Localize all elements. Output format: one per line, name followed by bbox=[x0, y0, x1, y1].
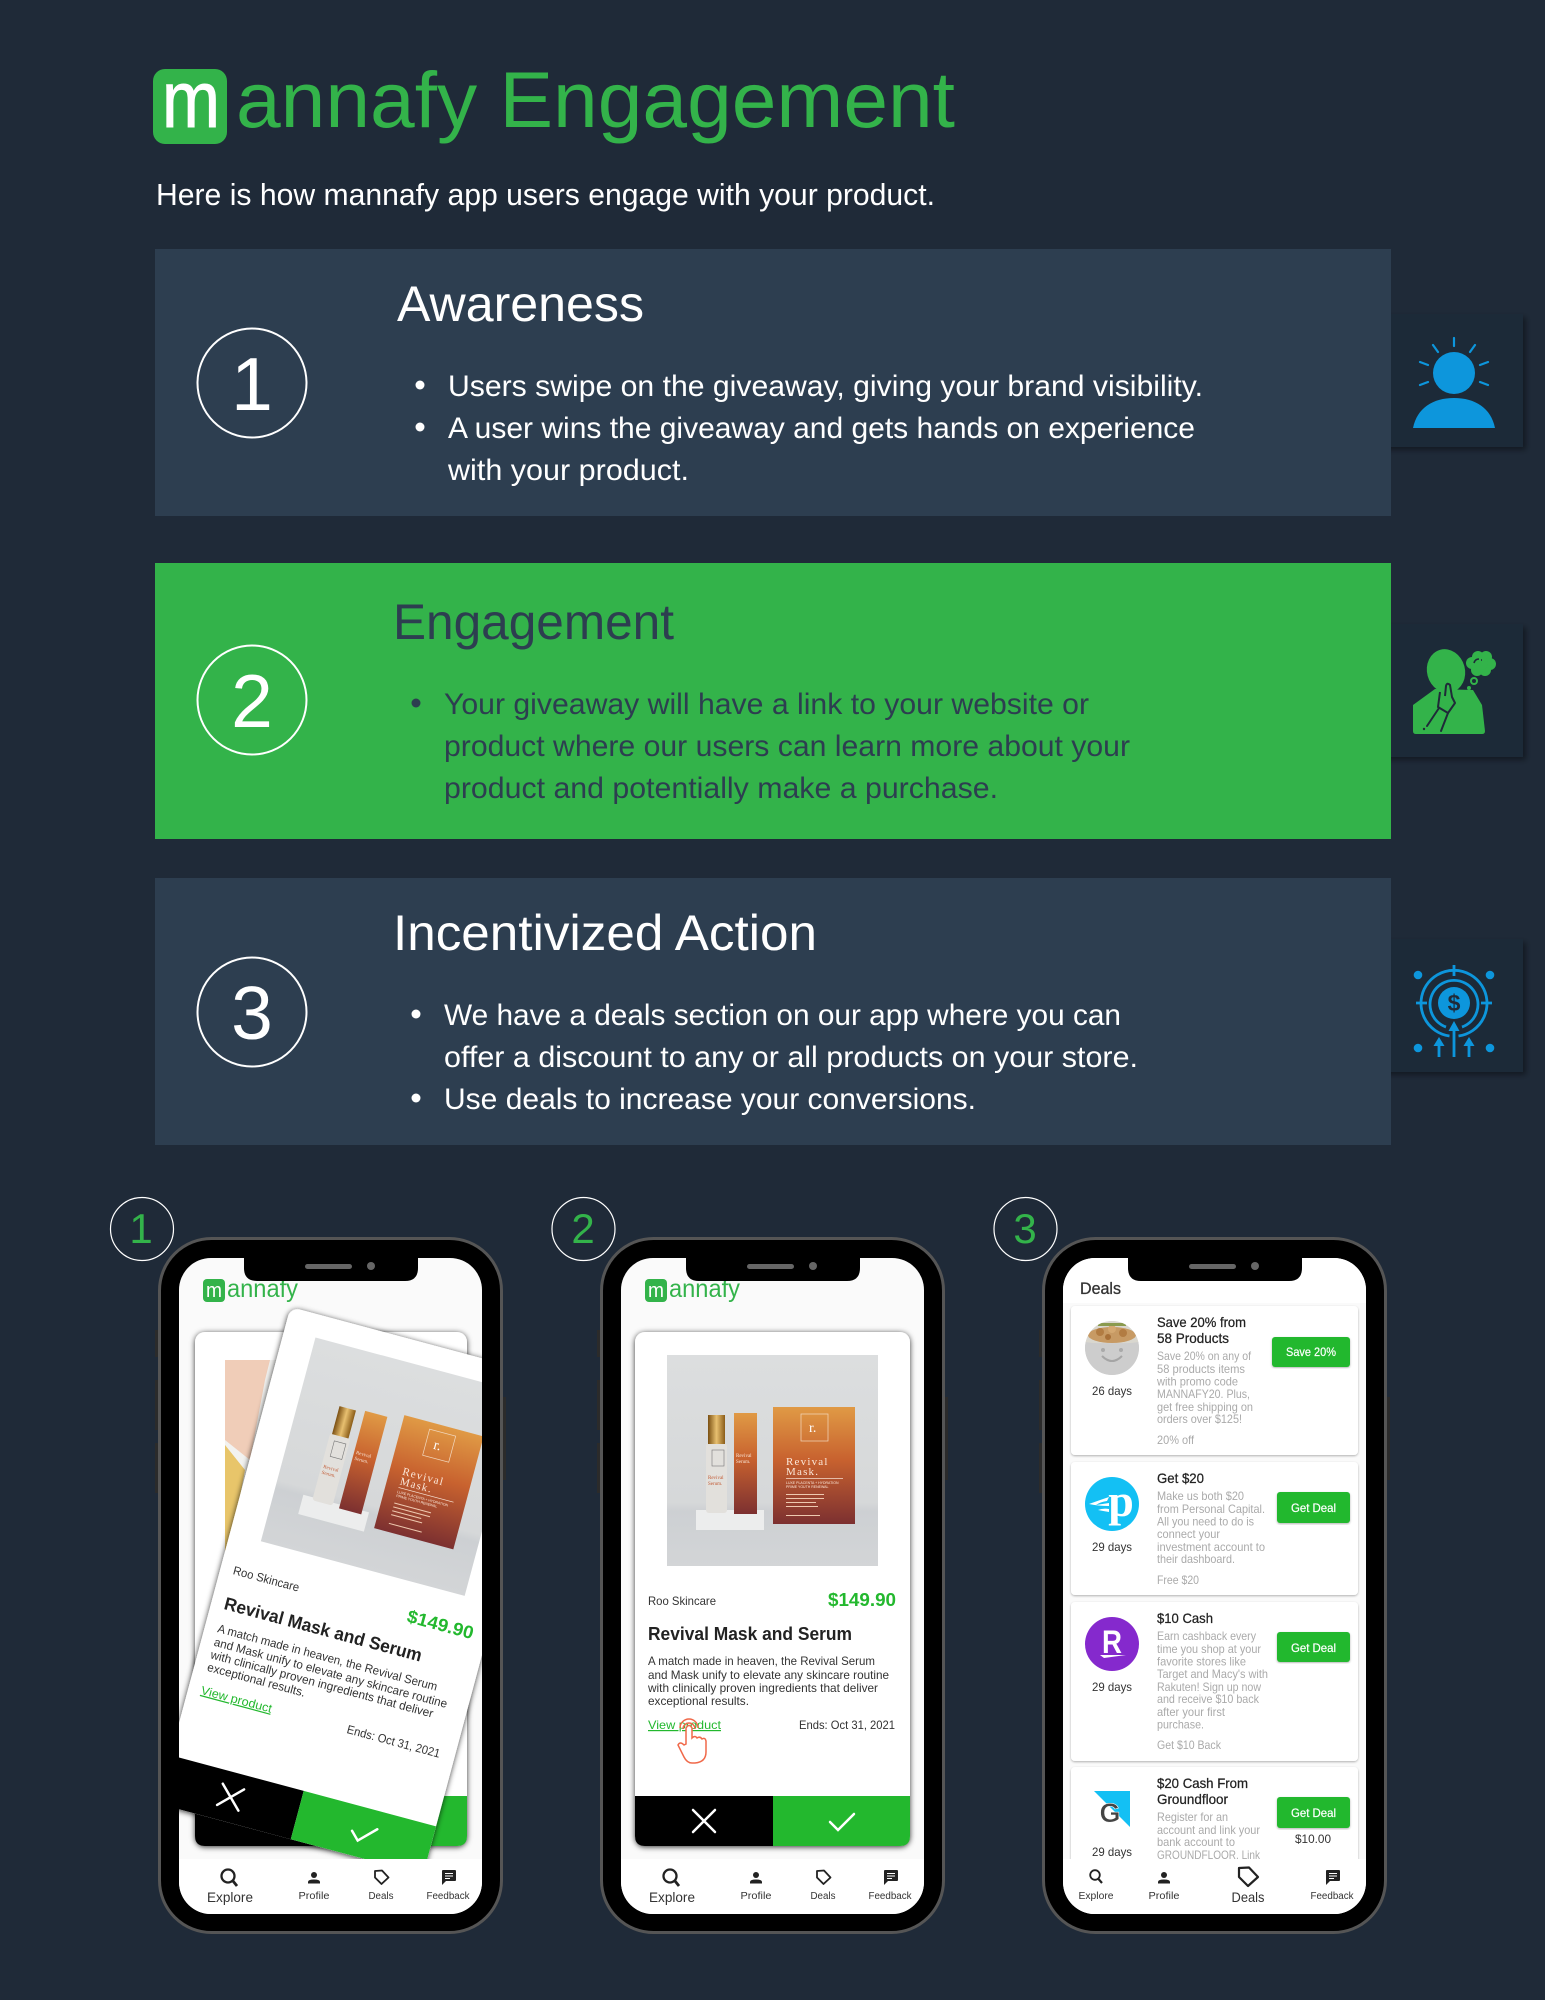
product photo: Revival bbox=[322, 1465, 339, 1474]
deal card 1 bbox=[1071, 1306, 1358, 1455]
logo: m bbox=[206, 1280, 222, 1302]
phone 2: product screen bbox=[597, 1238, 948, 1932]
nav: deals bbox=[368, 1870, 394, 1902]
front swiped card: with clinically proven ingredients that deliver bbox=[208, 1647, 435, 1721]
nav: deals active bbox=[1232, 1868, 1264, 1905]
icon: target with dollar coin: $ bbox=[1448, 990, 1461, 1016]
nav: feedback bbox=[427, 1870, 470, 1899]
deal card 2: Make us both $20 bbox=[1157, 1489, 1244, 1503]
product card: A match made in heaven, the Revival Serum bbox=[648, 1654, 875, 1668]
bottom navigation bbox=[1063, 1859, 1366, 1914]
bullet list bbox=[412, 688, 1130, 805]
deal card 1: with promo code bbox=[1156, 1374, 1238, 1388]
deal image: bowl bbox=[1085, 1321, 1139, 1375]
deal card 3: $10 Cash bbox=[1157, 1610, 1213, 1626]
deal card 3: Target and Macy's with bbox=[1157, 1667, 1268, 1681]
nav: profile bbox=[1149, 1872, 1179, 1899]
deal logo: rakuten bbox=[1085, 1617, 1139, 1671]
product card: exceptional results. bbox=[648, 1694, 749, 1708]
deal logo: personal capital bbox=[1085, 1475, 1139, 1531]
deal card 1: MANNAFY20. Plus, bbox=[1157, 1387, 1250, 1401]
deal card 3: Get $10 Back bbox=[1157, 1738, 1222, 1752]
deal card 3: 29 days bbox=[1092, 1680, 1132, 1694]
product photo: Serum. bbox=[321, 1471, 336, 1479]
deal card 3: favorite stores like bbox=[1157, 1654, 1246, 1668]
product photo: LUXE PLACENTA + HYDRATION bbox=[397, 1490, 449, 1508]
deal card 1: 26 days bbox=[1092, 1384, 1132, 1398]
heading: awareness: Awareness bbox=[397, 276, 644, 332]
deal card 2: Get $20 bbox=[1157, 1470, 1204, 1486]
deal logo: groundfloor: G bbox=[1099, 1798, 1121, 1828]
button: get deal: Get Deal bbox=[1291, 1806, 1336, 1820]
front swiped card: and Mask unify to elevate any skincare routine bbox=[212, 1635, 449, 1711]
step number 3 bbox=[198, 958, 306, 1066]
product photo: r. bbox=[432, 1438, 443, 1454]
deal card 1: 58 Products bbox=[1157, 1330, 1229, 1346]
nav: feedback bbox=[1310, 1870, 1354, 1902]
icon card: engagement bbox=[1380, 624, 1523, 757]
front swiped card bbox=[179, 1306, 482, 1859]
nav: deals: Deals bbox=[368, 1891, 394, 1902]
bullet list: Use deals to increase your conversions. bbox=[444, 1083, 976, 1116]
deal card 1: 58 products items bbox=[1157, 1362, 1245, 1376]
bullet list: offer a discount to any or all products on your store. bbox=[444, 1041, 1138, 1074]
bullet list: product where our users can learn more about your bbox=[444, 730, 1130, 763]
phone number badge 1: 1 bbox=[129, 1205, 153, 1252]
notch bbox=[244, 1258, 418, 1281]
nav: feedback: Feedback bbox=[426, 1891, 470, 1902]
product photo: Mask. bbox=[399, 1476, 434, 1496]
phone number badge 2 bbox=[552, 1198, 615, 1260]
bullet list bbox=[416, 370, 1203, 487]
deal card 3: and receive $10 back bbox=[1157, 1692, 1260, 1706]
nav: profile: Profile bbox=[1148, 1891, 1180, 1902]
front swiped card: A match made in heaven, the Revival Serum bbox=[216, 1621, 439, 1694]
phone 3: deals screen bbox=[1039, 1238, 1390, 1932]
bullet list: product and potentially make a purchase. bbox=[444, 772, 998, 805]
front swiped card: Ends: Oct 31, 2021 bbox=[345, 1722, 442, 1761]
button: save 20%: Save 20% bbox=[1286, 1345, 1336, 1359]
icon: tapping hand bbox=[678, 1719, 706, 1763]
deal card 1: Save 20% on any of bbox=[1157, 1349, 1252, 1363]
deal card 1: Save 20% from bbox=[1157, 1314, 1246, 1330]
deal card 2: All you need to do is bbox=[1157, 1514, 1254, 1528]
nav: deals: Deals bbox=[810, 1891, 836, 1902]
nav: feedback: Feedback bbox=[1310, 1891, 1354, 1902]
deal card 2: from Personal Capital. bbox=[1157, 1502, 1265, 1516]
deals heading: Deals bbox=[1080, 1279, 1121, 1298]
deal card 4: $10.00 bbox=[1295, 1832, 1331, 1846]
deal card 3: purchase. bbox=[1157, 1718, 1204, 1732]
deal logo: personal capital: p bbox=[1108, 1475, 1134, 1526]
nav: profile bbox=[299, 1872, 329, 1899]
product photo: r. bbox=[809, 1421, 816, 1436]
deal card 1: get free shipping on bbox=[1157, 1400, 1253, 1414]
rear card bbox=[195, 1332, 467, 1846]
phone number badge 3: 3 bbox=[1013, 1205, 1037, 1252]
notch bbox=[1128, 1258, 1302, 1281]
product photo: Revival bbox=[401, 1466, 445, 1488]
deal card 2: investment account to bbox=[1157, 1540, 1265, 1554]
deal card 2: 29 days bbox=[1092, 1540, 1132, 1554]
nav: profile: Profile bbox=[740, 1891, 772, 1902]
reject and accept buttons bbox=[635, 1796, 910, 1846]
step number 2 bbox=[198, 646, 306, 754]
deal card 4: 29 days bbox=[1092, 1845, 1132, 1859]
nav: explore: Explore bbox=[1078, 1891, 1114, 1902]
nav: explore: Explore bbox=[649, 1889, 695, 1905]
deal logo: rakuten: R bbox=[1102, 1624, 1122, 1660]
nav: explore: Explore bbox=[207, 1889, 253, 1905]
bullet list: We have a deals section on our app where you can bbox=[444, 999, 1121, 1032]
front swiped card: $149.90 bbox=[405, 1606, 476, 1643]
deal card 4: GROUNDFLOOR. Link bbox=[1157, 1848, 1261, 1862]
product text: Roo Skincare bbox=[232, 1563, 301, 1595]
nav: feedback bbox=[869, 1870, 912, 1899]
product card: $149.90 bbox=[828, 1590, 896, 1610]
nav: explore bbox=[207, 1870, 253, 1905]
phone number badge 1 bbox=[110, 1198, 174, 1260]
panel: awareness bbox=[155, 249, 1391, 516]
logo bbox=[203, 1279, 298, 1302]
icon: mannafy logo: m bbox=[162, 55, 220, 144]
product photo: Revival bbox=[708, 1476, 724, 1481]
panel: incentivized action bbox=[155, 878, 1391, 1145]
product photo: Revival bbox=[355, 1451, 372, 1460]
product text: Roo Skincare bbox=[648, 1594, 716, 1608]
button: get deal: Get Deal bbox=[1291, 1641, 1336, 1655]
deal card 3: after your first bbox=[1157, 1705, 1226, 1719]
nav: deals active: Deals bbox=[1232, 1889, 1264, 1905]
product photo: LUXE PLACENTA + HYDRATION bbox=[786, 1481, 839, 1485]
panel: engagement bbox=[155, 563, 1391, 839]
bullet list: A user wins the giveaway and gets hands on experience bbox=[448, 412, 1195, 445]
product photo: Revival bbox=[736, 1454, 752, 1459]
logo: annafy bbox=[227, 1275, 298, 1303]
deal card 3: Rakuten! Sign up now bbox=[1157, 1680, 1261, 1694]
front swiped card: exceptional results. bbox=[206, 1660, 307, 1700]
nav: profile: Profile bbox=[298, 1891, 330, 1902]
phone 1: swipe screen bbox=[155, 1237, 506, 1934]
phone number badge 2: 2 bbox=[571, 1205, 595, 1252]
icon: person with rays bbox=[1413, 338, 1495, 428]
product photo bbox=[261, 1338, 482, 1596]
step number 3: 3 bbox=[231, 971, 273, 1055]
icon: thinking person bbox=[1413, 645, 1496, 734]
step number 2: 2 bbox=[231, 659, 273, 743]
bullet list bbox=[412, 999, 1138, 1116]
deal card 4 bbox=[1071, 1767, 1358, 1917]
reject and accept buttons bbox=[179, 1758, 436, 1859]
deal logo: groundfloor bbox=[1094, 1791, 1130, 1828]
nav: deals bbox=[810, 1870, 836, 1902]
deal card 4: Register for an bbox=[1157, 1810, 1228, 1824]
bullet list: Users swipe on the giveaway, giving your brand visibility. bbox=[448, 370, 1203, 403]
product card: Revival Mask and Serum bbox=[648, 1624, 852, 1644]
step number 1: 1 bbox=[231, 342, 273, 426]
deal card 2: their dashboard. bbox=[1157, 1552, 1235, 1566]
icon card: awareness bbox=[1380, 314, 1523, 447]
bottom navigation bbox=[621, 1868, 924, 1914]
deal card 2: Free $20 bbox=[1157, 1573, 1199, 1587]
deal card 2 bbox=[1071, 1462, 1358, 1595]
nav: explore bbox=[649, 1870, 695, 1905]
logo: annafy bbox=[669, 1275, 740, 1303]
deal card 4: account and link your bbox=[1157, 1823, 1260, 1837]
button: save 20% bbox=[1272, 1337, 1350, 1367]
product photo: Revival bbox=[786, 1456, 829, 1468]
button: get deal bbox=[1277, 1492, 1350, 1523]
step number 1 bbox=[198, 328, 306, 438]
icon: target with dollar coin bbox=[1414, 965, 1494, 1057]
nav: profile bbox=[741, 1872, 771, 1899]
deal card 4: Groundfloor bbox=[1157, 1791, 1228, 1807]
product card: Ends: Oct 31, 2021 bbox=[799, 1718, 895, 1732]
deal card 3: time you shop at your bbox=[1157, 1642, 1261, 1656]
button: get deal: Get Deal bbox=[1291, 1501, 1336, 1515]
product photo: PRIME YOUTH RENEWAL bbox=[786, 1485, 828, 1489]
product photo: PRIME YOUTH RENEWAL bbox=[396, 1494, 438, 1509]
bottom navigation bbox=[179, 1859, 482, 1914]
button: get deal bbox=[1277, 1632, 1350, 1662]
button: get deal bbox=[1277, 1797, 1350, 1828]
nav: feedback: Feedback bbox=[868, 1891, 912, 1902]
logo bbox=[645, 1279, 740, 1302]
front swiped card: Revival Mask and Serum bbox=[222, 1593, 424, 1665]
product card bbox=[635, 1332, 910, 1846]
product photo: Serum. bbox=[354, 1457, 369, 1465]
deal card 3 bbox=[1071, 1602, 1358, 1761]
deal card 4: bank account to bbox=[1157, 1835, 1235, 1849]
front swiped card: View product bbox=[200, 1683, 274, 1716]
product card: View product bbox=[648, 1718, 722, 1732]
bullet list: with your product. bbox=[447, 454, 689, 487]
title bbox=[153, 55, 955, 144]
product photo: Serum. bbox=[708, 1482, 722, 1487]
product card: with clinically proven ingredients that deliver bbox=[647, 1681, 878, 1695]
logo: m bbox=[648, 1280, 664, 1302]
deal card 3: Earn cashback every bbox=[1157, 1629, 1256, 1643]
deal card 1: orders over $125! bbox=[1157, 1412, 1242, 1426]
product photo bbox=[667, 1355, 878, 1566]
heading: incentivized action: Incentivized Action bbox=[393, 905, 817, 961]
product photo: Mask. bbox=[786, 1466, 819, 1478]
nav: explore bbox=[1078, 1870, 1114, 1902]
product card: and Mask unify to elevate any skincare routine bbox=[648, 1668, 889, 1682]
phone number badge 3 bbox=[994, 1198, 1057, 1260]
bullet list: Your giveaway will have a link to your website or bbox=[444, 688, 1089, 721]
title text: annafy Engagement bbox=[236, 55, 955, 144]
product photo: Serum. bbox=[736, 1460, 750, 1465]
deal card 2: connect your bbox=[1157, 1527, 1220, 1541]
deal card 1: 20% off bbox=[1157, 1433, 1195, 1447]
deal card 4: $20 Cash From bbox=[1157, 1775, 1248, 1791]
icon card: incentivized action bbox=[1380, 939, 1523, 1072]
notch bbox=[686, 1258, 860, 1281]
subtitle: Here is how mannafy app users engage with your product. bbox=[156, 177, 935, 212]
heading: engagement: Engagement bbox=[393, 594, 674, 650]
